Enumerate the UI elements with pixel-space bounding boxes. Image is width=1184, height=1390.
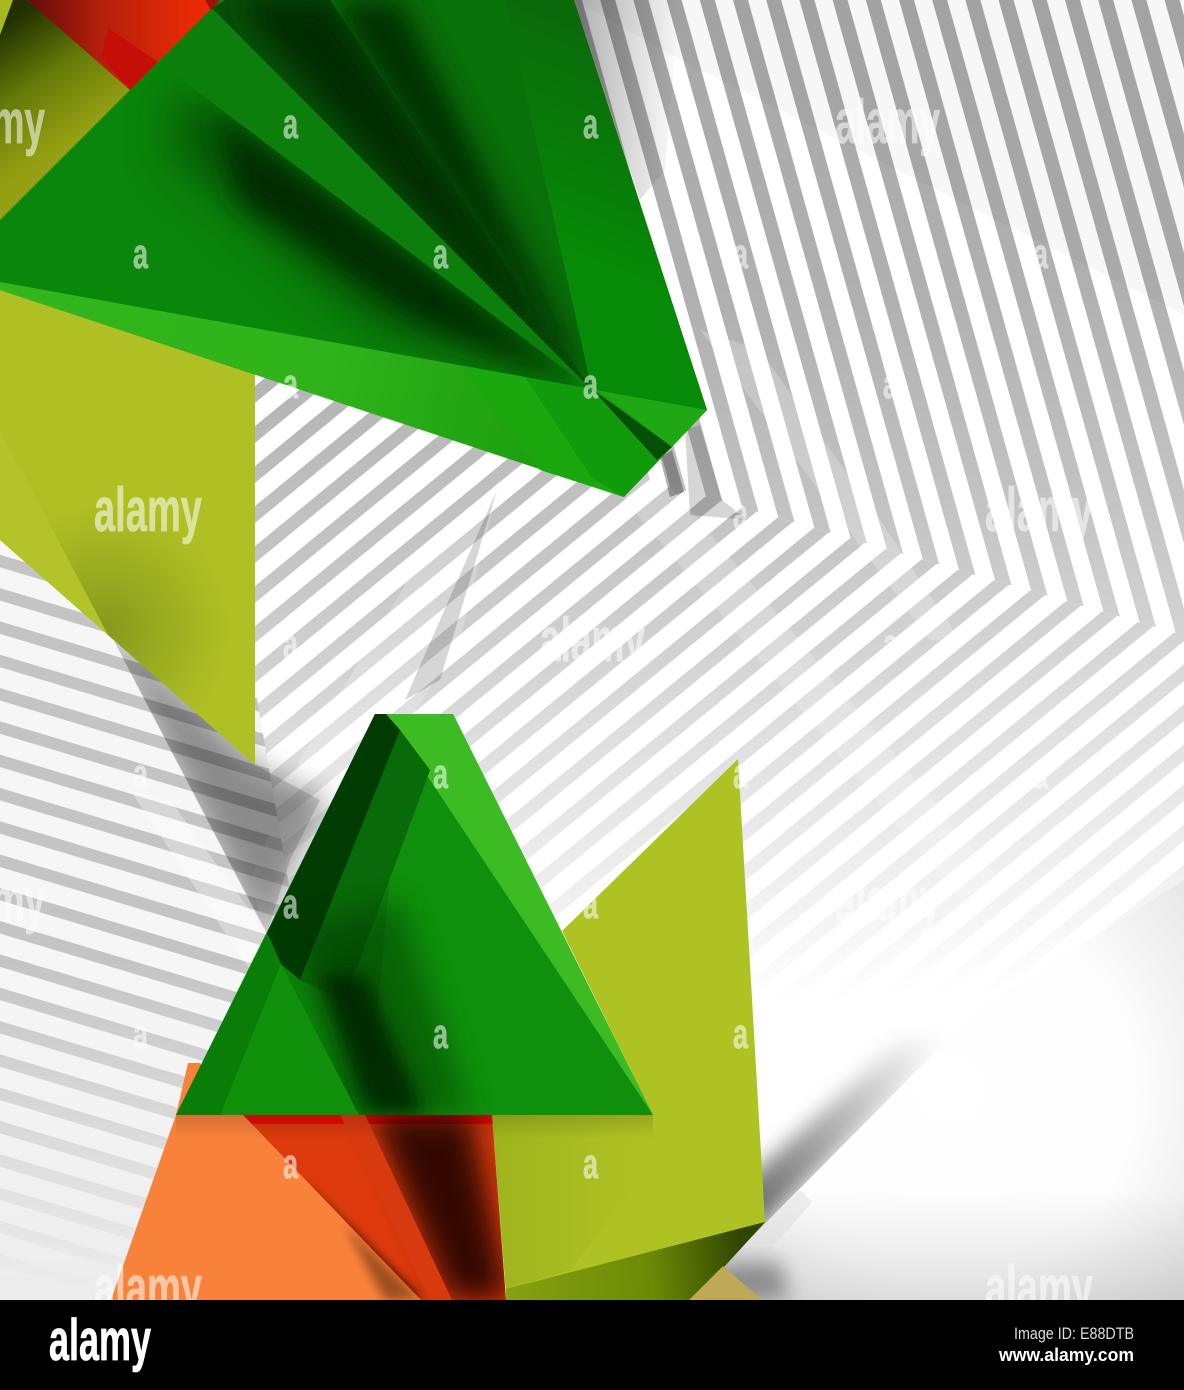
alamy watermark grid: a [583,880,598,927]
orange edge shadow [345,1225,421,1300]
alamy watermark grid: a [883,360,898,407]
bright green band [0,282,707,497]
second dark stripe [300,730,430,1000]
alamy watermark grid: alamy [94,1254,202,1323]
alamy watermark grid: a [883,620,898,667]
alamy watermark grid: a [283,620,298,667]
right fan [505,0,707,410]
mid left olive wedge [0,280,255,765]
alamy watermark grid: alamy [94,476,202,545]
inner left mid-tone [220,714,402,1115]
lower soft core shadow [300,900,470,1115]
alamy watermark grid: a [733,750,748,797]
alamy watermark grid: a [1033,230,1048,277]
alamy watermark grid: a [1033,750,1048,797]
image id: Image ID: E88DTB [1014,1324,1134,1343]
lower red shape [243,1115,510,1300]
body soft shadow [170,80,592,392]
alamy watermark grid: a [283,1140,298,1187]
alamy watermark grid: a [733,1010,748,1057]
alamy watermark grid: alamy [835,866,940,935]
alamy watermark grid: a [733,490,748,537]
alamy watermark grid: alamy [985,1254,1093,1323]
alamy watermark grid: a [433,750,448,797]
triangle foot shadow [176,1115,653,1140]
central cast shadows [110,425,748,933]
bottom right pale floor panel [690,880,1184,1300]
alamy watermark grid: a [133,750,148,797]
alamy watermark grid: alamy [835,88,940,157]
alamy watermark grid: a [583,1140,598,1187]
dark fold at tip [592,389,672,460]
alamy watermark grid: a [1033,1010,1048,1057]
central green triangle [176,714,653,1115]
alamy watermark grid: alamy [540,606,645,675]
alamy watermark grid: a [433,230,448,277]
bottom left stripe fade [0,960,330,1300]
dark fan one [212,0,592,390]
alamy watermark grid: a [583,360,598,407]
large upper green shape [0,0,707,497]
alamy watermark grid: a [433,1010,448,1057]
left sliver [176,933,281,1115]
footer logo: alamy [49,1308,151,1373]
lower left small triangle [220,964,359,1115]
green base [0,0,707,497]
alamy watermark grid: a [133,230,148,277]
alamy watermark grid: alamy [985,476,1093,545]
narrow strip [160,8,592,390]
top-left olive shard [0,0,135,230]
alamy watermark grid: a [283,360,298,407]
tan fragment [689,1266,762,1300]
tip facet [600,391,707,447]
alamy watermark grid: a [283,880,298,927]
floor corner shadow [700,1262,790,1300]
alamy watermark grid: a [733,230,748,277]
website: www.alamy.com [998,1345,1134,1365]
alamy watermark grid: a [583,100,598,147]
dark left stripe [267,714,400,980]
dark fan two [330,0,592,390]
right olive panel [492,759,765,1300]
alamy watermark grid: a [283,100,298,147]
footer bar [0,1300,1184,1390]
shadow above floor panel [727,1030,960,1262]
alamy watermark grid: a [133,1010,148,1057]
soft light and grey bands over stripes [130,0,1184,1000]
lower orange shape [111,1063,421,1300]
lower facets [459,365,624,497]
alamy watermark grid: a [883,1140,898,1187]
top red shard [27,0,220,90]
bright right band [386,714,653,1115]
dark olive base [506,1222,765,1300]
dark stripes beside top green edge [574,0,680,200]
